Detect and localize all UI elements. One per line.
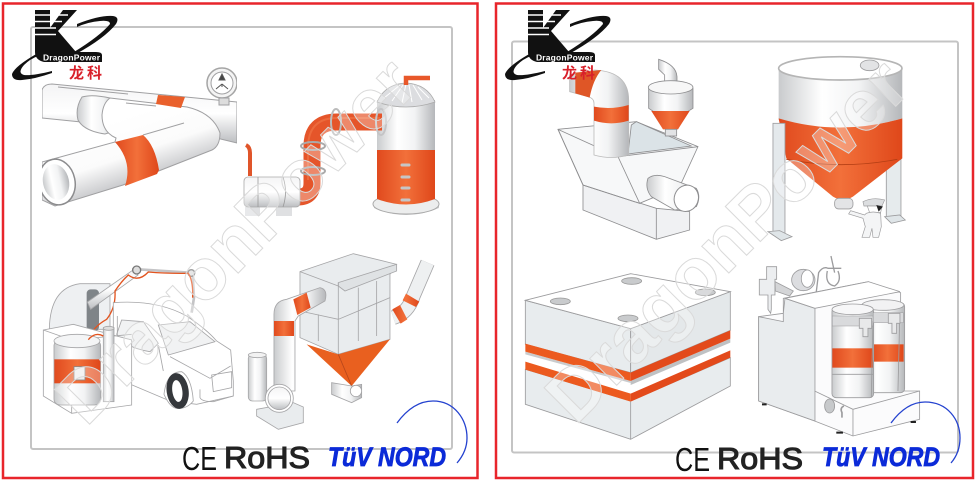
logo: right DragonPower: DragonPower [536, 52, 594, 62]
panel: left inner card [31, 27, 452, 449]
illustration: insulated pipes with gauge [35, 68, 237, 208]
logo: right DragonPower [505, 10, 610, 82]
illustration: heated press plates [525, 274, 730, 439]
certifications: left [182, 401, 467, 477]
illustration: hopper with ducts [558, 59, 702, 239]
illustration: pipe to tank [244, 78, 439, 216]
panel: left frame [3, 4, 478, 478]
certifications: right [675, 402, 960, 478]
illustration: silo with operator [768, 57, 905, 241]
certifications: right: RoHS [717, 441, 803, 476]
certifications: right: CE [675, 441, 710, 478]
logo: left DragonPower: 龙科 [69, 64, 102, 82]
watermark: left DragonPower: DragonPower [41, 43, 431, 439]
logo: left DragonPower: DragonPower [43, 52, 101, 62]
certifications: left: RoHS [224, 440, 310, 475]
panel: right frame [496, 4, 973, 478]
watermark: right DragonPower: DragonPower [530, 44, 924, 438]
certifications: right: TüV NORD [822, 442, 940, 472]
illustration: dust collector with ducts [248, 254, 428, 429]
logo: left DragonPower [12, 10, 117, 82]
certifications: left: CE [182, 440, 217, 477]
panel: right inner card [512, 42, 958, 452]
logo: right DragonPower: 龙科 [562, 64, 595, 82]
illustration: robotic sealing arm, drum and car [43, 266, 233, 413]
illustration: dispensing machine with drums [759, 256, 920, 436]
certifications: left: TüV NORD [328, 442, 446, 472]
